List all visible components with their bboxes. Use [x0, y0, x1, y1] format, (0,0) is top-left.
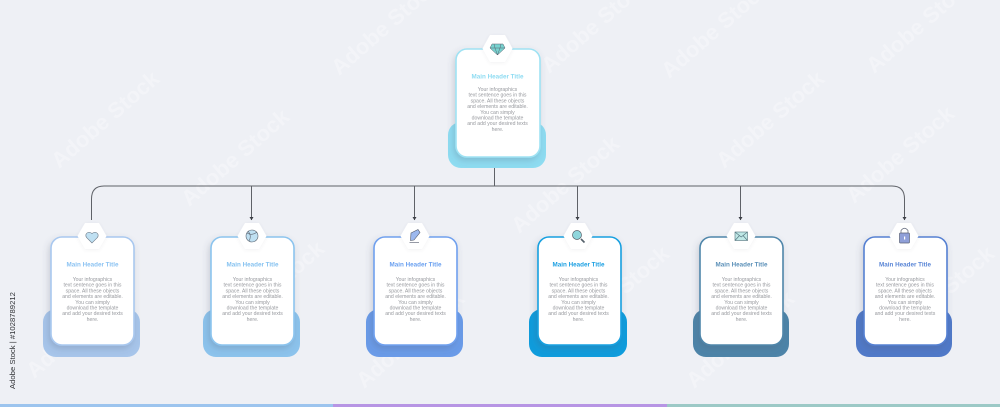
card 2 front	[211, 237, 294, 345]
card 6 body text: here.	[899, 317, 911, 323]
card 3 heading: Main Header Title	[389, 262, 442, 268]
top card body text: and elements are editable.	[467, 104, 528, 110]
top card body text: and add your desired texts	[467, 121, 528, 127]
card 5 body text: download the template	[716, 306, 768, 312]
card 2 back plate	[203, 309, 300, 357]
card 6 body text: Your infographics	[885, 277, 925, 283]
card 5 body text: text sentence goes in this	[712, 283, 771, 289]
card 2 body text: space. All these objects	[226, 288, 280, 294]
card 1 body text: Your infographics	[73, 277, 113, 283]
card 6 body text: space. All these objects	[878, 288, 932, 294]
icon: diamond	[490, 44, 505, 55]
card 1 body text: text sentence goes in this	[63, 283, 122, 289]
card 3 body text: Your infographics	[396, 277, 436, 283]
card 1 body text: and add your desired texts	[62, 311, 123, 317]
card 1 body text: You can simply	[75, 300, 110, 306]
top card hexagon badge	[482, 35, 512, 62]
card 1 back plate	[43, 309, 140, 357]
icon: globe	[246, 230, 258, 242]
card 2 body text: and elements are editable.	[222, 294, 283, 300]
card 6 body text: and elements are editable.	[875, 294, 935, 300]
card 5 hexagon badge	[726, 223, 756, 249]
card 1 body text: download the template	[67, 306, 119, 312]
card 6 heading: Main Header Title	[879, 262, 932, 268]
card 4 body text: Your infographics	[559, 277, 599, 283]
connector lines with arrows	[92, 168, 904, 220]
card 5 back plate	[693, 309, 789, 357]
watermark pattern: Adobe Stock	[681, 285, 800, 393]
icon: pen	[410, 230, 420, 242]
card 5 body text: and add your desired texts	[711, 311, 772, 317]
card 3 body text: text sentence goes in this	[386, 283, 445, 289]
card 5 body text: space. All these objects	[715, 288, 769, 294]
card 2 body text: text sentence goes in this	[223, 283, 282, 289]
watermark pattern: Adobe Stock	[506, 130, 625, 238]
icon: heart	[86, 232, 98, 243]
stock id side text: Adobe Stock | #1028789212	[8, 292, 17, 389]
card 6 hexagon badge	[890, 223, 918, 249]
top card body text: Your infographics	[478, 87, 518, 93]
card 4 body text: You can simply	[561, 300, 596, 306]
top card body text: You can simply	[480, 110, 515, 116]
card 6 back plate	[856, 309, 952, 357]
watermark pattern: Adobe Stock	[176, 103, 295, 211]
watermark pattern: Adobe Stock	[881, 240, 1000, 348]
card 5 body text: You can simply	[724, 300, 759, 306]
card 4 body text: space. All these objects	[552, 288, 606, 294]
watermark pattern: Adobe Stock	[711, 65, 830, 173]
top card body text: space. All these objects	[471, 98, 525, 104]
card 1 front	[51, 237, 134, 345]
top card body text: text sentence goes in this	[468, 93, 527, 99]
card 2 heading: Main Header Title	[226, 262, 279, 268]
card 5 heading: Main Header Title	[715, 262, 768, 268]
card 3 body text: space. All these objects	[389, 288, 443, 294]
card 2 body text: and add your desired texts	[222, 311, 283, 317]
card 3 body text: and elements are editable.	[385, 294, 446, 300]
card 1 body text: space. All these objects	[66, 288, 120, 294]
card 5 body text: here.	[736, 317, 747, 323]
card 1 heading: Main Header Title	[66, 262, 119, 268]
top card front	[456, 49, 540, 157]
card 4 front	[538, 237, 621, 345]
panel: top card	[448, 35, 546, 168]
top card back plate	[448, 122, 546, 168]
icon: envelope	[735, 232, 748, 240]
panel: card 4	[529, 223, 627, 357]
card 4 body text: text sentence goes in this	[549, 283, 608, 289]
panel: card 5	[693, 223, 789, 357]
watermark pattern: Adobe Stock	[211, 235, 330, 343]
card 1 body text: here.	[87, 317, 98, 323]
card 3 body text: You can simply	[398, 300, 433, 306]
card 3 body text: and add your desired texts	[385, 311, 446, 317]
top card heading: Main Header Title	[471, 74, 524, 80]
panel: card 1	[43, 223, 140, 357]
card 1 body text: and elements are editable.	[62, 294, 123, 300]
card 4 body text: here.	[573, 317, 584, 323]
card 2 body text: download the template	[227, 306, 279, 312]
card 1 hexagon badge	[78, 223, 106, 249]
panel: card 3	[366, 223, 463, 357]
card 2 body text: You can simply	[235, 300, 270, 306]
card 3 body text: download the template	[390, 306, 442, 312]
icon: padlock	[900, 228, 910, 243]
watermark pattern: Adobe Stock	[841, 100, 960, 208]
top card body text: download the template	[472, 116, 524, 122]
card 4 body text: download the template	[553, 306, 605, 312]
watermark pattern: Adobe Stock	[21, 275, 140, 383]
card 6 body text: You can simply	[888, 300, 923, 306]
card 2 body text: here.	[247, 317, 258, 323]
card 4 back plate	[529, 309, 627, 357]
card 3 back plate	[366, 309, 463, 357]
panel: card 6	[856, 223, 952, 357]
card 4 body text: and add your desired texts	[548, 311, 609, 317]
card 6 body text: text sentence goes in this	[876, 283, 934, 289]
icon: magnifier	[572, 230, 584, 242]
card 6 body text: and add your desired texts	[875, 311, 936, 317]
card 5 front	[700, 237, 783, 345]
card 3 body text: here.	[410, 317, 421, 323]
card 3 hexagon badge	[400, 223, 430, 249]
card 3 front	[374, 237, 457, 345]
card 6 body text: download the template	[879, 306, 931, 312]
card 4 body text: and elements are editable.	[548, 294, 609, 300]
panel: card 2	[203, 223, 300, 357]
card 2 body text: Your infographics	[233, 277, 273, 283]
card 4 hexagon badge	[564, 223, 592, 249]
bottom colour strip	[0, 404, 1000, 407]
card 5 body text: Your infographics	[722, 277, 762, 283]
watermark pattern: Adobe Stock	[556, 240, 675, 348]
card 2 hexagon badge	[238, 223, 266, 249]
watermark pattern: Adobe Stock	[351, 285, 470, 393]
card 6 front	[864, 237, 947, 345]
top card body text: here.	[492, 127, 503, 133]
watermark pattern: Adobe Stock	[46, 65, 165, 173]
card 4 heading: Main Header Title	[552, 262, 605, 268]
card 5 body text: and elements are editable.	[711, 294, 772, 300]
